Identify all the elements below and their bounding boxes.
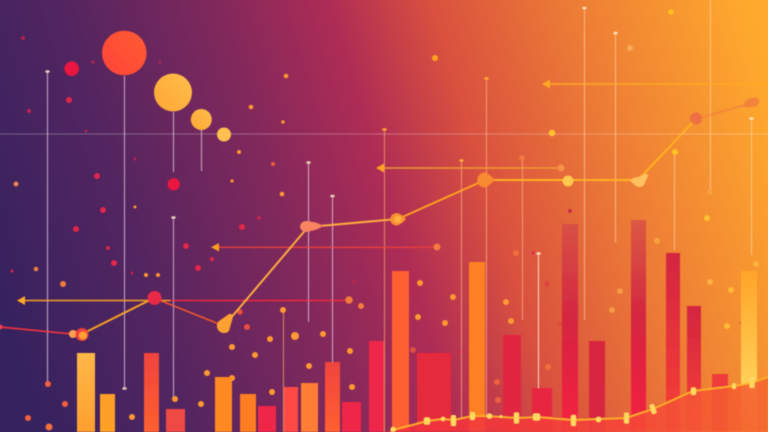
arrow upper right (542, 80, 768, 88)
trend line markers (0, 97, 759, 341)
bar chart (77, 220, 757, 432)
large balloon circles (64, 31, 231, 191)
arrow middle (211, 243, 436, 252)
main trend line (0, 103, 752, 334)
horizontal arrows (17, 80, 768, 305)
area chart with markers (384, 377, 768, 432)
arrow lower left (17, 296, 345, 305)
arrow centre (376, 164, 560, 172)
horizontal guide line (0, 134, 768, 135)
